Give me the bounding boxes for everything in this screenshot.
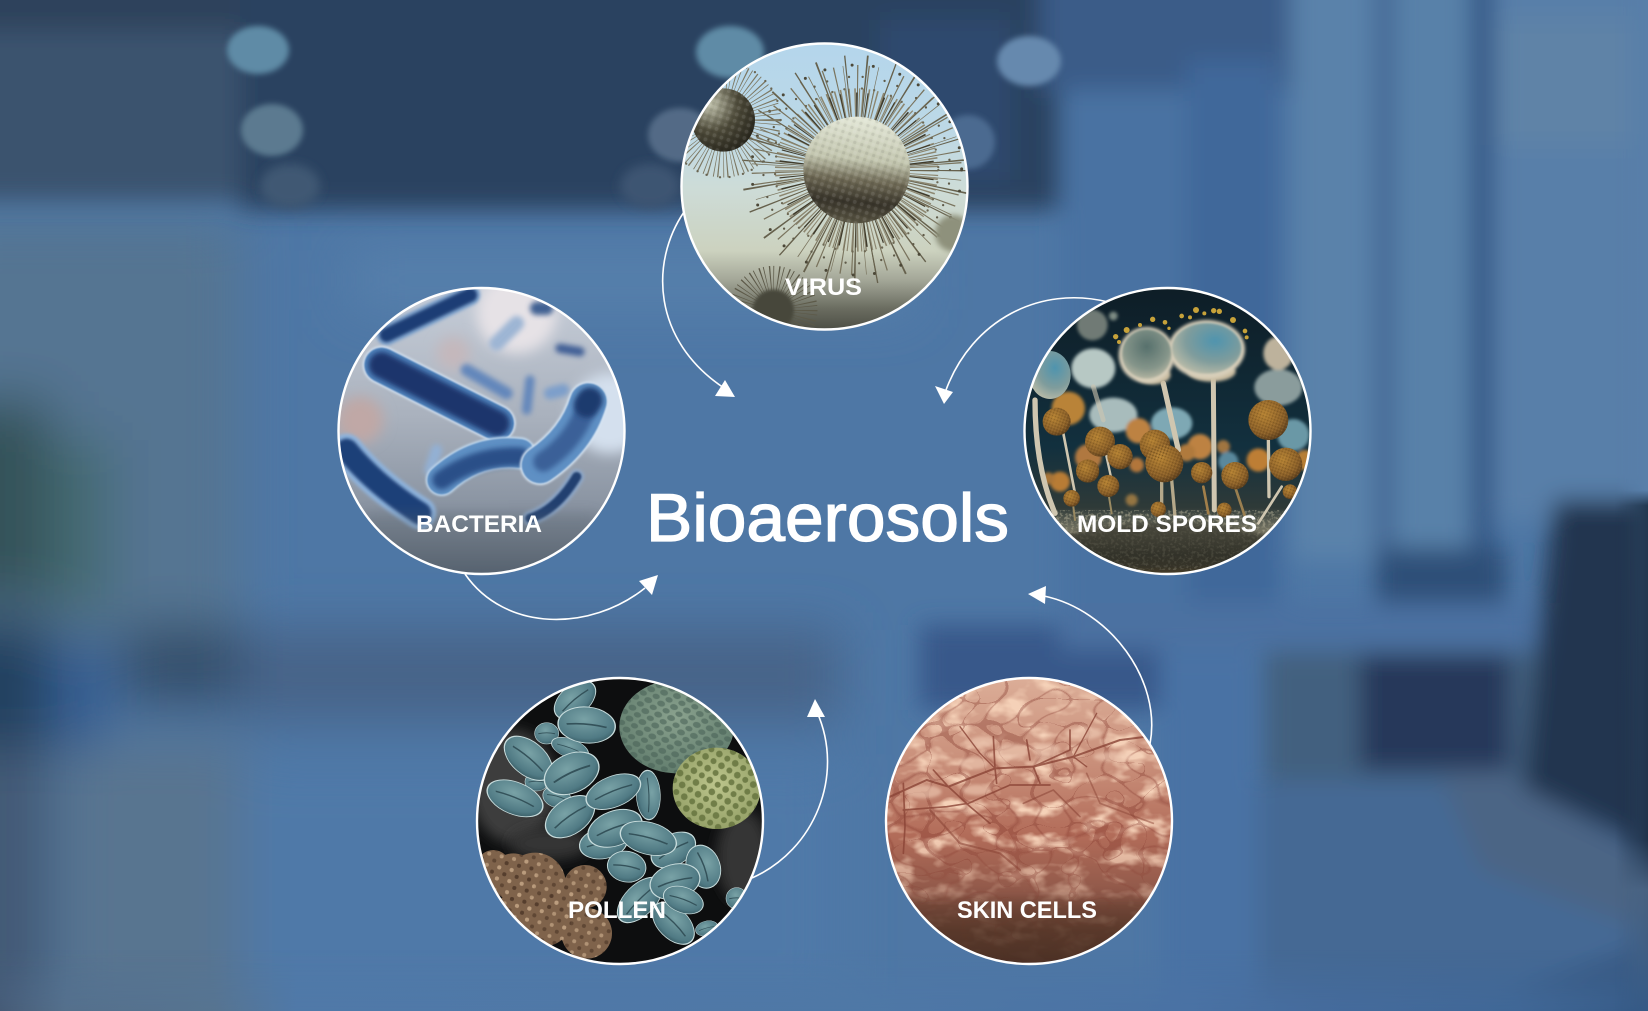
label: pollen: POLLEN [568,897,666,924]
label: bacteria: BACTERIA [416,511,542,538]
arrow: bacteria to centre [465,574,658,619]
label: skin cells: SKIN CELLS [957,897,1097,924]
soft edge colour correction [0,488,1648,1011]
arrow: pollen to centre [752,699,828,878]
arrow: mold spores to centre [935,298,1108,404]
label: mold spores: MOLD SPORES [1077,511,1257,538]
panel: virus [666,42,972,342]
bokeh lights [227,26,1061,208]
panel: bacteria [337,286,626,576]
panel: skin cells [884,676,1174,966]
title: Bioaerosols [646,480,1009,556]
arrow: skin cells to centre [1028,586,1152,744]
arrow: virus to centre [663,212,735,397]
panel: mold spores [1022,286,1315,578]
label: virus: VIRUS [785,274,862,301]
panel: pollen [470,673,770,966]
